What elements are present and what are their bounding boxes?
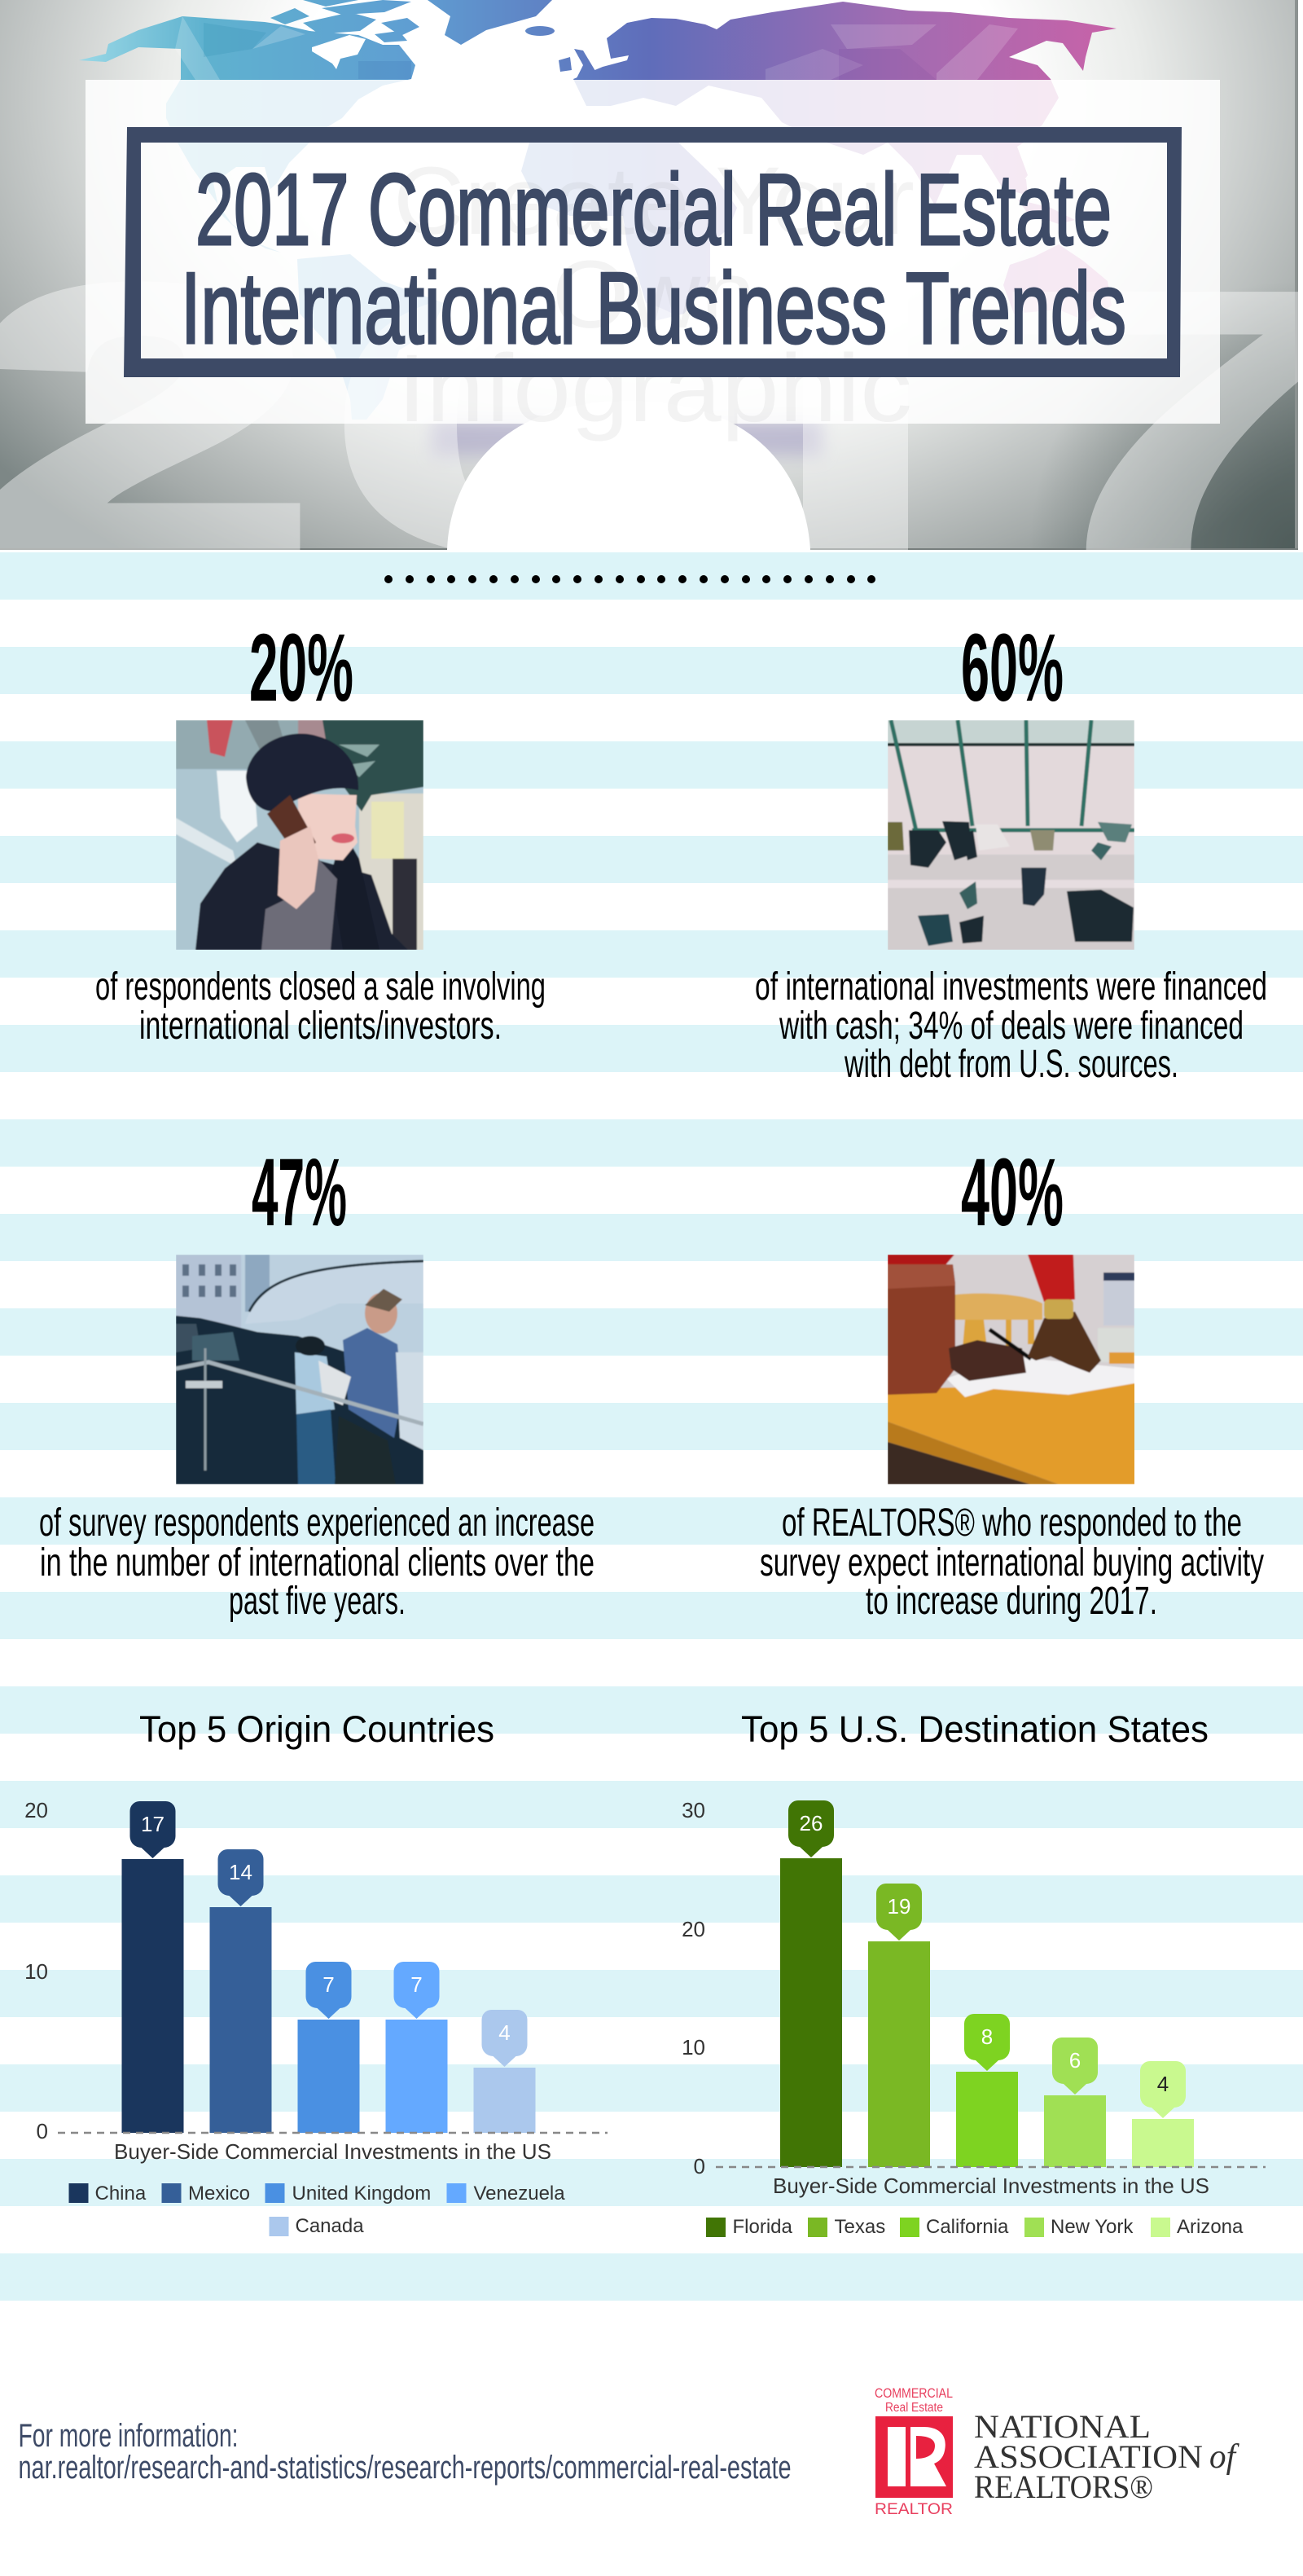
logo wordmark xyxy=(974,2408,1239,2505)
icon: world map xyxy=(79,0,1117,420)
legend: Arizona xyxy=(1177,2216,1244,2238)
watermark text: Own xyxy=(552,241,756,349)
logo mark: Real Estate xyxy=(885,2401,943,2415)
footer: more information: For more information: xyxy=(18,2418,238,2454)
header banner xyxy=(0,0,1298,550)
background numerals 2017 xyxy=(0,285,1298,550)
photo: people in atrium xyxy=(888,720,1134,950)
y axis labels: 10 xyxy=(24,1959,48,1984)
logo wordmark: REALTORS® xyxy=(974,2468,1153,2505)
legend xyxy=(68,2183,565,2237)
photo: commuters on stairs xyxy=(176,1255,423,1484)
value pins: 4 xyxy=(1157,2072,1169,2096)
logo mark: REALTOR xyxy=(875,2501,953,2518)
lavender shadow xyxy=(432,420,823,456)
bars xyxy=(780,1858,1194,2167)
y axis labels: 0 xyxy=(37,2119,48,2143)
title xyxy=(186,169,1125,345)
chart: Top 5 U.S. Destination States xyxy=(682,1708,1266,2238)
photo: signing a document xyxy=(888,1255,1134,1484)
value pins: 7 xyxy=(322,1972,335,1997)
watermark text: Create Your xyxy=(393,147,915,255)
stat description: of respondents closed a sale involving xyxy=(95,965,546,1009)
legend: Texas xyxy=(834,2216,885,2238)
stat description: international clients/investors. xyxy=(139,1004,502,1048)
x axis label: Buyer-Side Commercial Investments in the US xyxy=(773,2174,1209,2198)
logo mark xyxy=(875,2385,953,2518)
title frame xyxy=(124,127,1182,377)
logo wordmark: ASSOCIATION xyxy=(974,2438,1203,2475)
value pins: 7 xyxy=(410,1972,423,1997)
logo wordmark: of xyxy=(1209,2438,1239,2476)
panel: 40% stat xyxy=(760,1139,1264,1623)
translucent panel xyxy=(86,80,1220,424)
value pins: 8 xyxy=(981,2024,993,2049)
stat value 60%: 60% xyxy=(961,614,1064,722)
stat description: of survey respondents experienced an increase xyxy=(39,1501,594,1545)
legend: New York xyxy=(1051,2216,1134,2238)
panel: 20% stat xyxy=(95,614,546,1048)
background numerals 2017: 7 xyxy=(981,209,1303,633)
footer: more information xyxy=(18,2418,792,2486)
watermark text xyxy=(393,147,915,442)
logo wordmark: NATIONAL xyxy=(974,2408,1151,2445)
value pins: 4 xyxy=(498,2020,511,2045)
y axis labels xyxy=(682,1798,705,2178)
panel: 47% stat: 47% xyxy=(252,1139,347,1246)
background numerals 2017: 0 xyxy=(312,211,768,635)
striped background xyxy=(0,552,1303,2301)
chart title: Top 5 Origin Countries xyxy=(139,1708,494,1750)
x axis label: Buyer-Side Commercial Investments in the US xyxy=(114,2139,551,2164)
legend: Florida xyxy=(733,2216,793,2238)
y axis labels xyxy=(24,1798,48,2143)
stat description xyxy=(755,965,1267,1086)
legend: China xyxy=(94,2183,147,2205)
chart title: Top 5 U.S. Destination States xyxy=(741,1708,1209,1750)
watermark text: Infographic xyxy=(397,335,912,442)
y axis labels: 20 xyxy=(682,1917,705,1941)
value pins: 14 xyxy=(229,1860,252,1884)
y axis labels: 0 xyxy=(694,2154,705,2178)
value pins xyxy=(130,1801,528,2067)
panel: 47% stat xyxy=(39,1139,594,1623)
y axis labels: 20 xyxy=(24,1798,48,1822)
baseline xyxy=(716,2166,1266,2168)
value pins: 26 xyxy=(800,1811,823,1835)
value pins: 19 xyxy=(888,1894,910,1919)
stat value 20%: 20% xyxy=(249,614,353,722)
stat description xyxy=(39,1501,594,1623)
footer: more information: nar.realtor/research-and-statistics/research-reports/commercial-real-estate xyxy=(18,2450,792,2486)
stat description: to increase during 2017. xyxy=(866,1580,1157,1623)
bars xyxy=(122,1859,536,2133)
legend xyxy=(706,2216,1244,2238)
legend: Mexico xyxy=(188,2183,250,2205)
stat description: in the number of international clients over the xyxy=(40,1541,594,1585)
y axis labels: 10 xyxy=(682,2035,705,2059)
stat description: past five years. xyxy=(229,1580,406,1623)
legend: Canada xyxy=(295,2215,364,2237)
value pins: 6 xyxy=(1069,2048,1081,2073)
dotted divider xyxy=(384,575,875,583)
value pins xyxy=(788,1800,1186,2118)
logo mark: COMMERCIAL xyxy=(875,2385,953,2401)
white ellipse xyxy=(447,424,810,550)
legend: Venezuela xyxy=(474,2183,565,2205)
photo: woman on phone xyxy=(176,720,423,950)
panel: 60% stat xyxy=(755,614,1267,1086)
baseline xyxy=(58,2132,608,2134)
stat value 40%: 40% xyxy=(961,1139,1064,1246)
chart: Top 5 Origin Countries xyxy=(24,1708,608,2237)
logo: National Association of Realtors xyxy=(875,2385,1239,2518)
y axis labels: 30 xyxy=(682,1798,705,1822)
stat description xyxy=(760,1501,1264,1623)
legend: California xyxy=(926,2216,1009,2238)
legend: United Kingdom xyxy=(292,2183,431,2205)
stat description xyxy=(95,965,546,1048)
map details xyxy=(175,16,1018,80)
value pins: 17 xyxy=(141,1812,165,1836)
